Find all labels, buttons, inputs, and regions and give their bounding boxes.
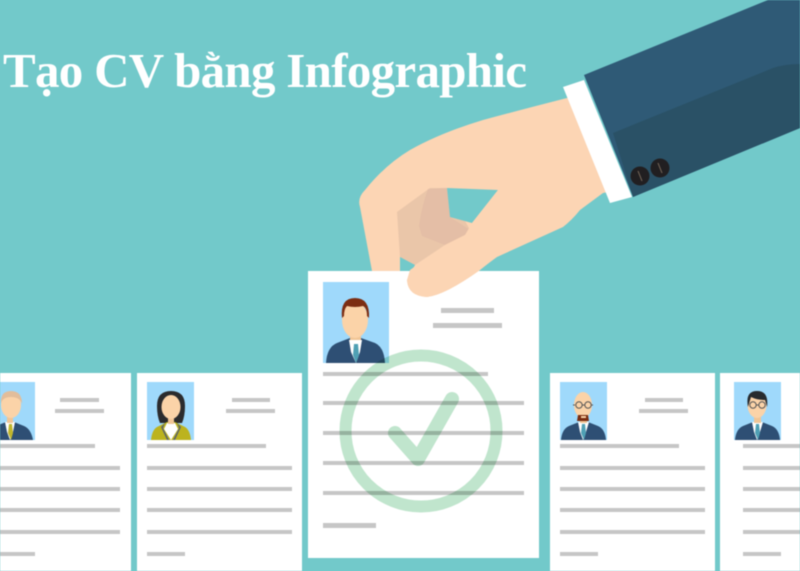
shaded finger xyxy=(397,188,470,265)
portrait: man with brown hair xyxy=(323,282,389,363)
sleeve xyxy=(584,0,800,197)
shirt cuff xyxy=(563,80,632,203)
portrait: bald man with glasses xyxy=(560,382,607,440)
icon: cuff buttons xyxy=(630,158,670,186)
panel: selected CV xyxy=(308,271,539,558)
title: Tạo CV bằng Infographic xyxy=(3,43,527,98)
panel: CV far left xyxy=(0,373,131,571)
portrait: man with dark hair and glasses xyxy=(734,382,781,440)
portrait: blond man xyxy=(0,382,35,440)
hand xyxy=(359,95,620,297)
hand with suit sleeve xyxy=(359,0,800,297)
thumb xyxy=(407,190,520,297)
panel: CV bald man xyxy=(550,373,715,571)
text lines xyxy=(323,308,524,528)
text lines xyxy=(147,398,292,556)
gap between fingers xyxy=(447,188,498,223)
panel: CV far right xyxy=(720,373,800,571)
gap near paper xyxy=(400,257,415,271)
portrait: woman xyxy=(147,382,194,440)
shaded finger, darker xyxy=(419,188,470,245)
text lines xyxy=(743,444,800,556)
icon: green check mark stamp xyxy=(346,356,496,506)
text lines xyxy=(560,398,705,556)
panel: CV woman xyxy=(137,373,302,571)
text lines xyxy=(0,398,120,556)
